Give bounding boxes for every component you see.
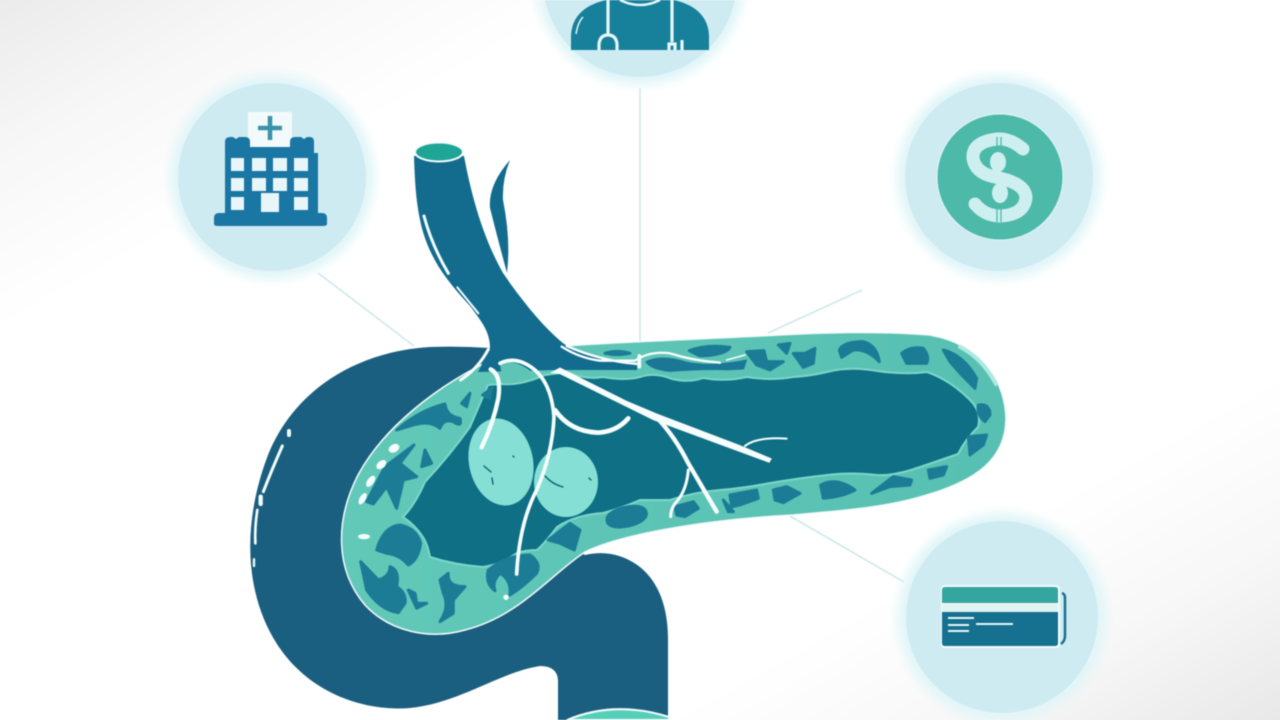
duct opening	[415, 142, 463, 162]
white duct branches	[461, 346, 787, 574]
pod in tail	[645, 357, 747, 372]
card body	[942, 612, 1058, 646]
card top band	[942, 587, 1058, 603]
dollar coin	[937, 114, 1063, 240]
hospital windows	[231, 158, 308, 212]
card magnetic stripe	[942, 604, 1058, 612]
duct tube	[414, 156, 637, 372]
duodenum	[250, 347, 669, 720]
duct side sliver	[490, 160, 510, 273]
duodenum lower opening	[567, 709, 669, 720]
tail highlight	[960, 347, 996, 384]
icon: credit card badge	[898, 513, 1106, 720]
icon: dollar badge	[897, 75, 1101, 279]
doctor torso	[571, 0, 709, 50]
icon: doctor badge	[535, 0, 745, 85]
main white duct	[551, 368, 772, 463]
dollar sign	[973, 137, 1026, 222]
lobules: tail	[605, 342, 990, 529]
pancreas body	[342, 332, 1006, 634]
card text lines	[948, 618, 1013, 631]
bile duct	[414, 142, 747, 383]
doctor stethoscope	[576, 0, 682, 50]
card back edge	[1061, 593, 1065, 644]
connector lines	[318, 88, 904, 582]
lobule highlights	[357, 442, 509, 600]
hospital sign	[248, 112, 292, 150]
duct highlights	[424, 216, 478, 313]
cyst specks	[484, 456, 591, 487]
cyst right	[534, 447, 598, 517]
card front	[941, 585, 1060, 648]
doctor collar	[620, 0, 660, 5]
pancreas lumen	[403, 369, 979, 567]
hospital cross	[258, 116, 282, 140]
duodenum highlights	[254, 431, 289, 566]
hospital building	[214, 137, 327, 226]
lobules: head	[361, 388, 648, 622]
cysts	[461, 412, 598, 517]
cyst left	[461, 412, 541, 512]
icon: hospital badge	[170, 75, 374, 279]
teal patch under arch	[500, 362, 535, 383]
pancreas	[342, 332, 1006, 634]
